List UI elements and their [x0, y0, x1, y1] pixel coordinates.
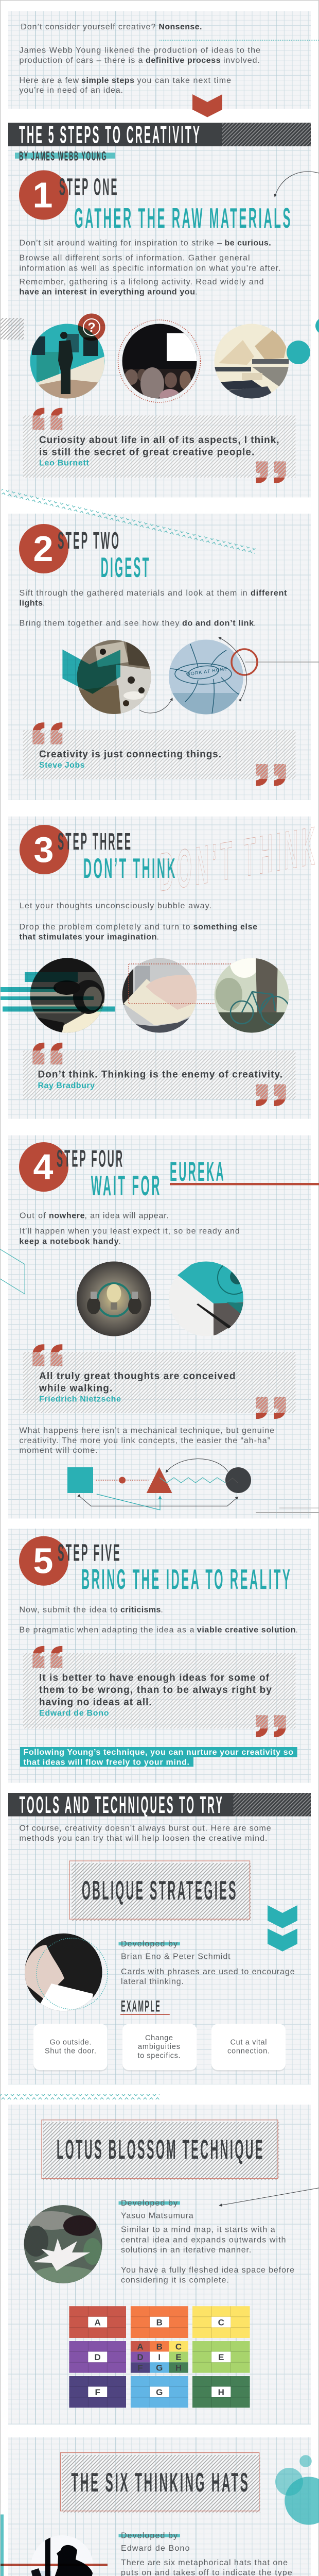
arrow: curved: [275, 172, 319, 197]
step number 1: 1: [33, 175, 52, 215]
text: step four body: [20, 1211, 240, 1246]
text: BY JAMES WEBB YOUNG: [19, 149, 107, 164]
text: STEP FIVE: [58, 1539, 121, 1566]
text: intro paragraph: James Webb Young likened the production of ideas to the: [20, 46, 260, 55]
text: step one body: have an interest in everything around you: [20, 288, 195, 297]
chart: lotus blossom grid: B: [156, 2317, 163, 2327]
text: step five body: criticisms: [120, 1605, 161, 1614]
text: STEP FOUR: [57, 1145, 124, 1172]
arrow: right arc: [219, 637, 246, 699]
text: step one body: [20, 239, 281, 297]
text: opening question: Don’t consider yourself creative?: [21, 23, 155, 31]
chart: lotus blossom grid: H: [175, 2363, 182, 2373]
text: step five body: .: [295, 1626, 298, 1635]
chart: lotus blossom grid: D: [137, 2352, 144, 2362]
quote: Leo Burnett: [23, 408, 295, 483]
photo: cinema audience: [122, 324, 198, 404]
text: STEP ONE: [59, 173, 118, 200]
arrow: link between photos: [139, 698, 172, 713]
teal dot, page edge: [315, 317, 319, 334]
text: oblique strategies description: Cards with phrases are used to encourage: [121, 1968, 295, 1976]
card: cut a vital connection: connection.: [227, 2047, 270, 2055]
text: lotus description: Similar to a mind map, it starts with a: [121, 2226, 275, 2234]
chart: lotus blossom grid: A: [137, 2342, 144, 2351]
photo: jigsaw pieces: [77, 639, 152, 715]
text: intro paragraph: [20, 46, 260, 65]
text: step five body: .: [161, 1605, 163, 1614]
text: linking concepts: moment will come.: [20, 1446, 98, 1455]
icon: question mark: [78, 313, 105, 341]
text: step two body: .: [43, 599, 45, 608]
title box: oblique strategies: [69, 1861, 251, 1921]
callout: following Young's technique: that ideas will flow freely to your mind.: [24, 1758, 189, 1767]
chart: lotus blossom grid: C: [175, 2342, 182, 2351]
text: step five body: Be pragmatic when adapting the idea as a: [20, 1626, 194, 1635]
card: change ambiguities: to specifics.: [138, 2052, 180, 2060]
text: simple steps: [20, 76, 231, 95]
card: go outside: [33, 2024, 108, 2072]
text: step two body: Bring them together and see how they: [20, 619, 179, 628]
decorative hatch: [1, 318, 24, 340]
text: simple steps: you can take next time: [137, 76, 231, 85]
teal side bar: [1, 2514, 4, 2576]
text: step three body: something else: [193, 923, 257, 931]
photo: gallery visitor: [30, 324, 105, 399]
text: simple steps: simple steps: [81, 76, 134, 85]
photo: bicycle in forest: [214, 958, 289, 1032]
text: step two body: Sift through the gathered materials and look at them in: [20, 589, 247, 598]
quote: Leo Burnett: Curiosity about life in all of its aspects, I think,: [39, 435, 279, 446]
photo: headphones: [30, 958, 107, 1033]
text: oblique strategies description: Developed by: [121, 1940, 178, 1948]
photo: notebook and pen: [169, 1261, 251, 1336]
panel: step three: [8, 817, 311, 1119]
quote: Ray Bradbury: Ray Bradbury: [38, 1081, 95, 1090]
text: step five body: viable creative solution: [197, 1626, 295, 1635]
step number 5: [19, 1536, 68, 1586]
text: linking concepts: creativity. The more you link concepts, the easier the “ah-ha”: [20, 1436, 270, 1445]
panel: step one: [8, 146, 311, 498]
text: step one body: Browse all different sorts of information. Gather general: [20, 254, 250, 263]
quote: Friedrich Nietzsche: [23, 1344, 295, 1419]
heading: eureka with underline: EUREKA: [170, 1157, 225, 1187]
text: intro paragraph: involved.: [223, 56, 260, 65]
step number 1: [19, 170, 68, 219]
text: step one body: Remember, gathering is a lifelong activity. Read widely and: [20, 278, 263, 286]
text: step two body: do and don’t link: [182, 619, 254, 628]
red line: [1, 2564, 108, 2566]
quote: Leo Burnett: is still the secret of great creative people.: [39, 447, 254, 458]
chart: lotus blossom grid: A: [95, 2317, 101, 2327]
panel: six thinking hats: [8, 2437, 311, 2576]
teal outline shape: [0, 1249, 25, 1294]
step number 5: 5: [33, 1541, 53, 1581]
text: STEP THREE: [58, 828, 132, 855]
text: WAIT FOR: [91, 1170, 162, 1201]
chart: lotus blossom grid: G: [156, 2387, 163, 2397]
quote: Edward de Bono: It is better to have enough ideas for some of: [39, 1673, 270, 1684]
text: lotus description: You have a fully fleshed idea space before: [121, 2266, 294, 2275]
text: step four body: Out of: [20, 1211, 46, 1220]
text: lotus description: [118, 2199, 294, 2285]
step number 4: 4: [33, 1147, 54, 1187]
text: lotus description: solutions in an iterative manner.: [121, 2246, 251, 2255]
text: step four body: , an idea will appear.: [84, 1211, 169, 1220]
title box: six thinking hats: [60, 2453, 260, 2513]
quote: Edward de Bono: Edward de Bono: [39, 1709, 109, 1718]
callout: following Young's technique: Following Young’s technique, you can nurture your creativity so: [24, 1748, 293, 1757]
photo: open books: [214, 324, 291, 399]
text: simple steps: you’re in need of an idea.: [20, 86, 123, 95]
panel: step two: [8, 514, 311, 800]
text: step one body: Don’t sit around waiting for inspiration to strike –: [20, 239, 222, 247]
chart: lotus blossom grid: G: [156, 2363, 163, 2373]
panel: introduction: [8, 11, 311, 109]
photo: light bulbs: [77, 1261, 152, 1336]
diagram: linking shapes: [67, 1459, 251, 1510]
chart: lotus blossom grid: [69, 2306, 250, 2408]
text: DON’T THINK: [83, 852, 177, 884]
text: lotus description: Yasuo Matsumura: [121, 2211, 193, 2220]
teal bars: [1, 972, 115, 1012]
photo: hand with card: [25, 1933, 102, 2011]
card: cut a vital connection: [211, 2024, 286, 2072]
text: step two body: lights: [20, 599, 43, 608]
card: go outside: Go outside.: [49, 2038, 92, 2046]
text: step one body: be curious.: [224, 239, 271, 247]
heading: example: [120, 1997, 170, 2015]
step number 2: [19, 524, 68, 573]
quote: Ray Bradbury: Don’t think. Thinking is the enemy of creativity.: [38, 1070, 282, 1080]
step number 2: 2: [33, 529, 53, 569]
callout: following Young's technique: [20, 1747, 297, 1767]
teal bubbles: [275, 2455, 319, 2525]
text: step three body: Drop the problem completely and turn to: [20, 923, 190, 931]
zigzag line: [1, 489, 256, 554]
quote: Ray Bradbury: [23, 1043, 295, 1106]
text: step three body: [20, 902, 257, 942]
text: intro paragraph: definitive process: [146, 56, 221, 65]
quote: Edward de Bono: [23, 1646, 295, 1737]
subtitle: by James Webb Young: [15, 149, 115, 164]
photo: reading a book: [122, 958, 197, 1033]
chart: lotus blossom grid: E: [175, 2352, 182, 2362]
chart: lotus blossom grid: H: [218, 2387, 224, 2397]
text: step four body: keep a notebook handy: [20, 1237, 119, 1246]
text: step two body: [20, 589, 287, 628]
quote: Leo Burnett: Leo Burnett: [39, 459, 89, 468]
text: lotus description: central idea and expands outwards with: [121, 2235, 286, 2244]
quote: Edward de Bono: having no ideas at all.: [39, 1697, 152, 1708]
photo: silhouette at computer: [31, 2535, 94, 2576]
panel: oblique strategies: [8, 1817, 311, 2084]
card: change ambiguities: ambiguities: [138, 2043, 180, 2051]
text: step three body: .: [156, 933, 159, 942]
panel: step five: [8, 1529, 311, 1783]
text: linking concepts: What happens here isn’t a mechanical technique, but genuine: [20, 1427, 274, 1435]
text: linking concepts: [20, 1427, 274, 1455]
card: cut a vital connection: Cut a vital: [231, 2038, 267, 2046]
text: step four body: .: [118, 1237, 121, 1246]
text: intro paragraph: production of cars – there is a: [20, 56, 143, 65]
chart: lotus blossom grid: F: [95, 2387, 100, 2397]
panel: lotus blossom: [8, 2105, 311, 2425]
text: six hats description: There are six metaphorical hats that one: [121, 2558, 288, 2567]
dotted frame: [129, 964, 231, 1004]
icon: teal double chevron: [268, 1905, 297, 1952]
text: six hats description: Edward de Bono: [121, 2544, 190, 2553]
step number 3: 3: [34, 829, 54, 870]
quote: Steve Jobs: [23, 722, 295, 786]
quote: Friedrich Nietzsche: Friedrich Nietzsche: [39, 1395, 121, 1404]
chart: lotus blossom grid: E: [218, 2352, 224, 2362]
text: step five body: Now, submit the idea to: [20, 1605, 118, 1614]
photo: water lily: [24, 2205, 103, 2284]
text: step four body: It’ll happen when you least expect it, so be ready and: [20, 1227, 240, 1236]
dotted teal ring: [37, 1938, 108, 2009]
text: lotus description: Developed by: [121, 2199, 178, 2208]
text: oblique strategies description: [118, 1940, 295, 1986]
panel: step four: [8, 1136, 311, 1518]
text: step one body: information as well as specific information on what you’re after.: [20, 264, 281, 273]
text: step four body: nowhere: [49, 1211, 85, 1220]
card: go outside: Shut the door.: [45, 2047, 96, 2055]
text: step two body: .: [254, 619, 256, 628]
text: step two body: different: [251, 589, 287, 598]
text: simple steps: Here are a few: [20, 76, 79, 85]
step number 3: [20, 825, 69, 874]
card: change ambiguities: Change: [145, 2034, 173, 2042]
text: six hats description: Developed by: [121, 2532, 178, 2540]
text: tools intro: methods you can try that will help loosen the creative mind.: [20, 1834, 268, 1843]
quote: Steve Jobs: Creativity is just connecting things.: [39, 749, 221, 760]
red ring with line: [232, 649, 319, 675]
dotted ring: [118, 320, 201, 402]
card: change ambiguities: [122, 2024, 197, 2072]
text: STEP TWO: [58, 527, 120, 554]
quote: Edward de Bono: them to be wrong, than to be always right by: [39, 1685, 272, 1696]
heading: example: EXAMPLE: [121, 1997, 161, 2015]
text: six hats description: [118, 2532, 292, 2576]
text: DIGEST: [101, 551, 151, 583]
teal chevron: [62, 650, 120, 694]
text: oblique strategies description: lateral thinking.: [121, 1977, 184, 1986]
quote: Friedrich Nietzsche: All truly great thoughts are conceived: [39, 1371, 236, 1382]
teal dot: [287, 341, 310, 364]
title box: lotus blossom technique: [42, 2120, 279, 2180]
icon: red chevron: [192, 94, 222, 117]
dotted line: [160, 40, 319, 41]
arrow: pointer: [219, 2188, 319, 2206]
chart: lotus blossom grid: D: [95, 2352, 101, 2362]
zigzag line: [0, 2094, 160, 2099]
text: opening question: Nonsense.: [158, 23, 202, 31]
photo: mind map: [169, 639, 244, 715]
text: tools intro: Of course, creativity doesn’t always burst out. Here are some: [20, 1824, 271, 1833]
text: step three body: Let your thoughts unconsciously bubble away.: [20, 902, 211, 910]
quote: Friedrich Nietzsche: while walking.: [39, 1383, 112, 1394]
gray lines: [256, 1507, 319, 1513]
icon: question mark: ?: [87, 320, 96, 335]
text: oblique strategies description: Brian Eno & Peter Schmidt: [121, 1953, 231, 1961]
text: lotus description: considering it is complete.: [121, 2276, 229, 2285]
chart: lotus blossom grid: I: [158, 2352, 161, 2362]
chart: lotus blossom grid: C: [218, 2317, 224, 2327]
quote: Steve Jobs: Steve Jobs: [39, 761, 85, 770]
text: step three body: that stimulates your imagination: [20, 933, 156, 942]
text: step one body: .: [195, 288, 197, 297]
text: tools intro: [20, 1824, 271, 1843]
text: step five body: [20, 1605, 298, 1635]
chart: lotus blossom grid: B: [156, 2342, 163, 2351]
photo: mind map: WORK AT HOME: [186, 666, 228, 677]
step number 4: [19, 1142, 68, 1192]
chart: lotus blossom grid: F: [137, 2363, 143, 2373]
